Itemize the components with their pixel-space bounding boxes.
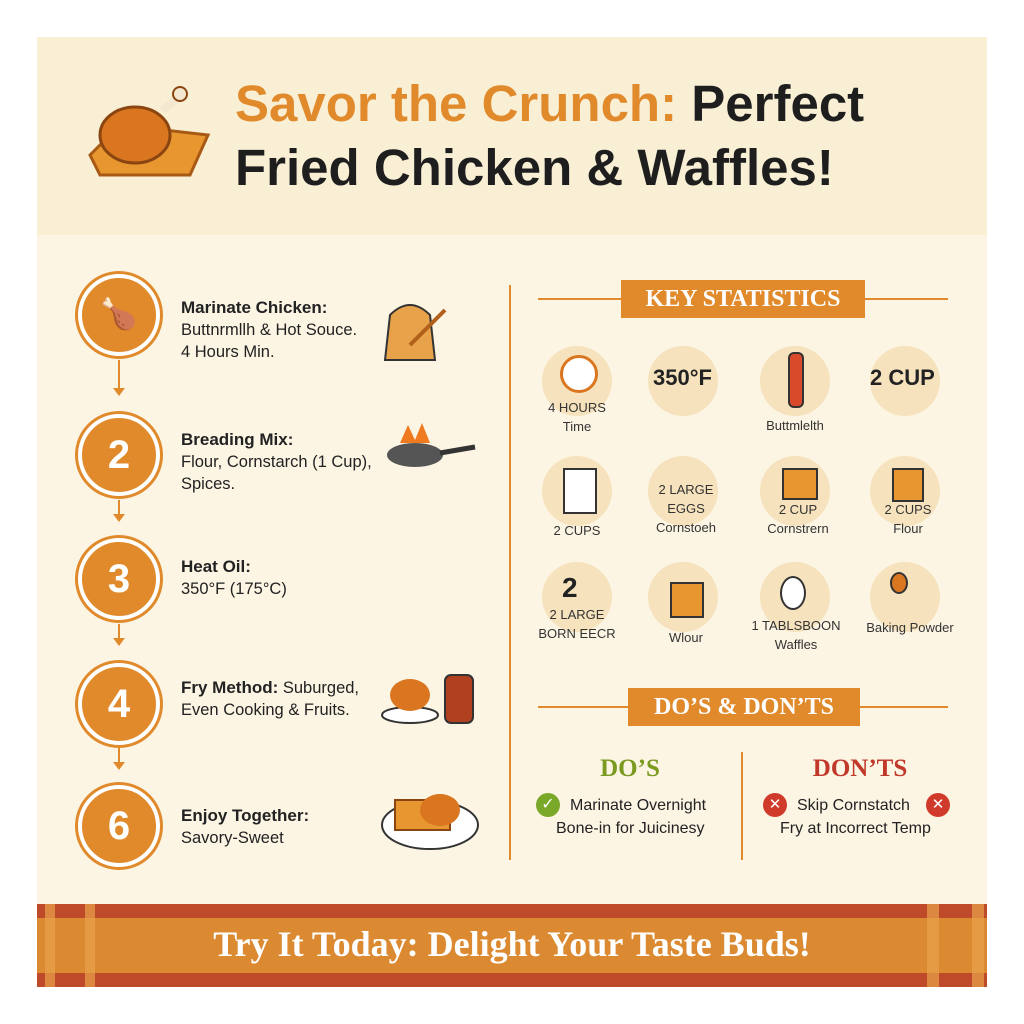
step 4 [78, 663, 160, 745]
step 4 text [181, 678, 359, 719]
step 1 text: 4 Hours Min. [181, 343, 275, 361]
step 3 text [181, 557, 287, 598]
step 2 text [181, 430, 372, 493]
step 4 text: Even Cooking & Fruits. [181, 701, 350, 719]
don'ts column [763, 755, 950, 837]
stats grid: 350°F [653, 365, 712, 390]
heading: key statistics: KEY STATISTICS [646, 286, 840, 312]
step 4 text: Fry Method: Suburged, [181, 678, 359, 697]
stats grid: 2 CUP [870, 365, 935, 390]
step 6 text [181, 806, 309, 847]
stats grid: 2 CUPS [554, 523, 600, 538]
step 1 text [181, 298, 357, 361]
step 1: 🍗 [100, 298, 138, 331]
do's column: DO’S [600, 755, 660, 782]
divider do/dont [741, 752, 743, 860]
don'ts column: ✕ [932, 796, 944, 813]
stats grid: 1 TABLSBOON [751, 618, 841, 633]
stats grid: BORN EECR [538, 626, 616, 641]
icon: chicken on waffle [88, 86, 210, 176]
stats grid: Time [563, 419, 591, 434]
stats grid: EGGS [667, 501, 705, 516]
stats grid [538, 346, 954, 652]
stats grid: Flour [893, 521, 923, 536]
stats grid: 2 LARGE [659, 482, 713, 497]
step 2 text: Breading Mix: [181, 430, 293, 449]
stats grid: 2 CUP [779, 502, 817, 517]
stats grid: 2 LARGE [550, 607, 604, 622]
do's column: ✓ [541, 796, 555, 813]
don'ts column: Skip Cornstatch [797, 797, 910, 814]
icons for steps [381, 304, 479, 850]
stats grid: Cornstoeh [656, 520, 716, 535]
step 3 [78, 538, 160, 620]
stats grid: 2 CUPS [885, 502, 931, 517]
stats grid: Wlour [669, 630, 703, 645]
stats grid: Baking Powder [866, 620, 954, 635]
don'ts column: Fry at Incorrect Temp [780, 820, 931, 837]
step 6 text: Enjoy Together: [181, 806, 309, 825]
do's column [536, 755, 706, 837]
stats grid: 2 [562, 572, 578, 603]
stats grid: Cornstrern [767, 521, 829, 536]
step 6 text: Savory-Sweet [181, 829, 284, 847]
step 2 text: Spices. [181, 475, 235, 493]
step 4: 4 [108, 682, 130, 726]
heading: do's and don'ts: DO’S & DON’TS [654, 694, 834, 720]
don'ts column: DON’TS [813, 755, 907, 782]
divider [509, 285, 511, 860]
step 2 text: Flour, Cornstarch (1 Cup), [181, 453, 372, 471]
footer banner: Try It Today: Delight Your Taste Buds! [213, 924, 811, 964]
step 3: 3 [108, 557, 130, 601]
don'ts column: ✕ [769, 796, 781, 813]
step 6 [78, 785, 160, 867]
step 1 text: Buttnrmllh & Hot Souce. [181, 321, 357, 339]
step 1 [78, 274, 160, 356]
do's column: Bone-in for Juicinesy [556, 820, 705, 837]
title: Fried Chicken & Waffles! [235, 139, 834, 196]
step 2: 2 [108, 433, 130, 477]
do's column: Marinate Overnight [570, 797, 706, 814]
title: Savor the Crunch: Perfect [235, 75, 864, 132]
footer banner [37, 904, 987, 987]
step 3 text: Heat Oil: [181, 557, 251, 576]
step 1 text: Marinate Chicken: [181, 298, 327, 317]
step 6: 6 [108, 804, 130, 848]
header band [37, 37, 987, 235]
stats grid: 4 HOURS [548, 400, 606, 415]
title [235, 75, 864, 196]
stats grid: Buttmlelth [766, 418, 824, 433]
step 3 text: 350°F (175°C) [181, 580, 287, 598]
step 2 [78, 414, 160, 496]
stats grid: Waffles [775, 637, 817, 652]
